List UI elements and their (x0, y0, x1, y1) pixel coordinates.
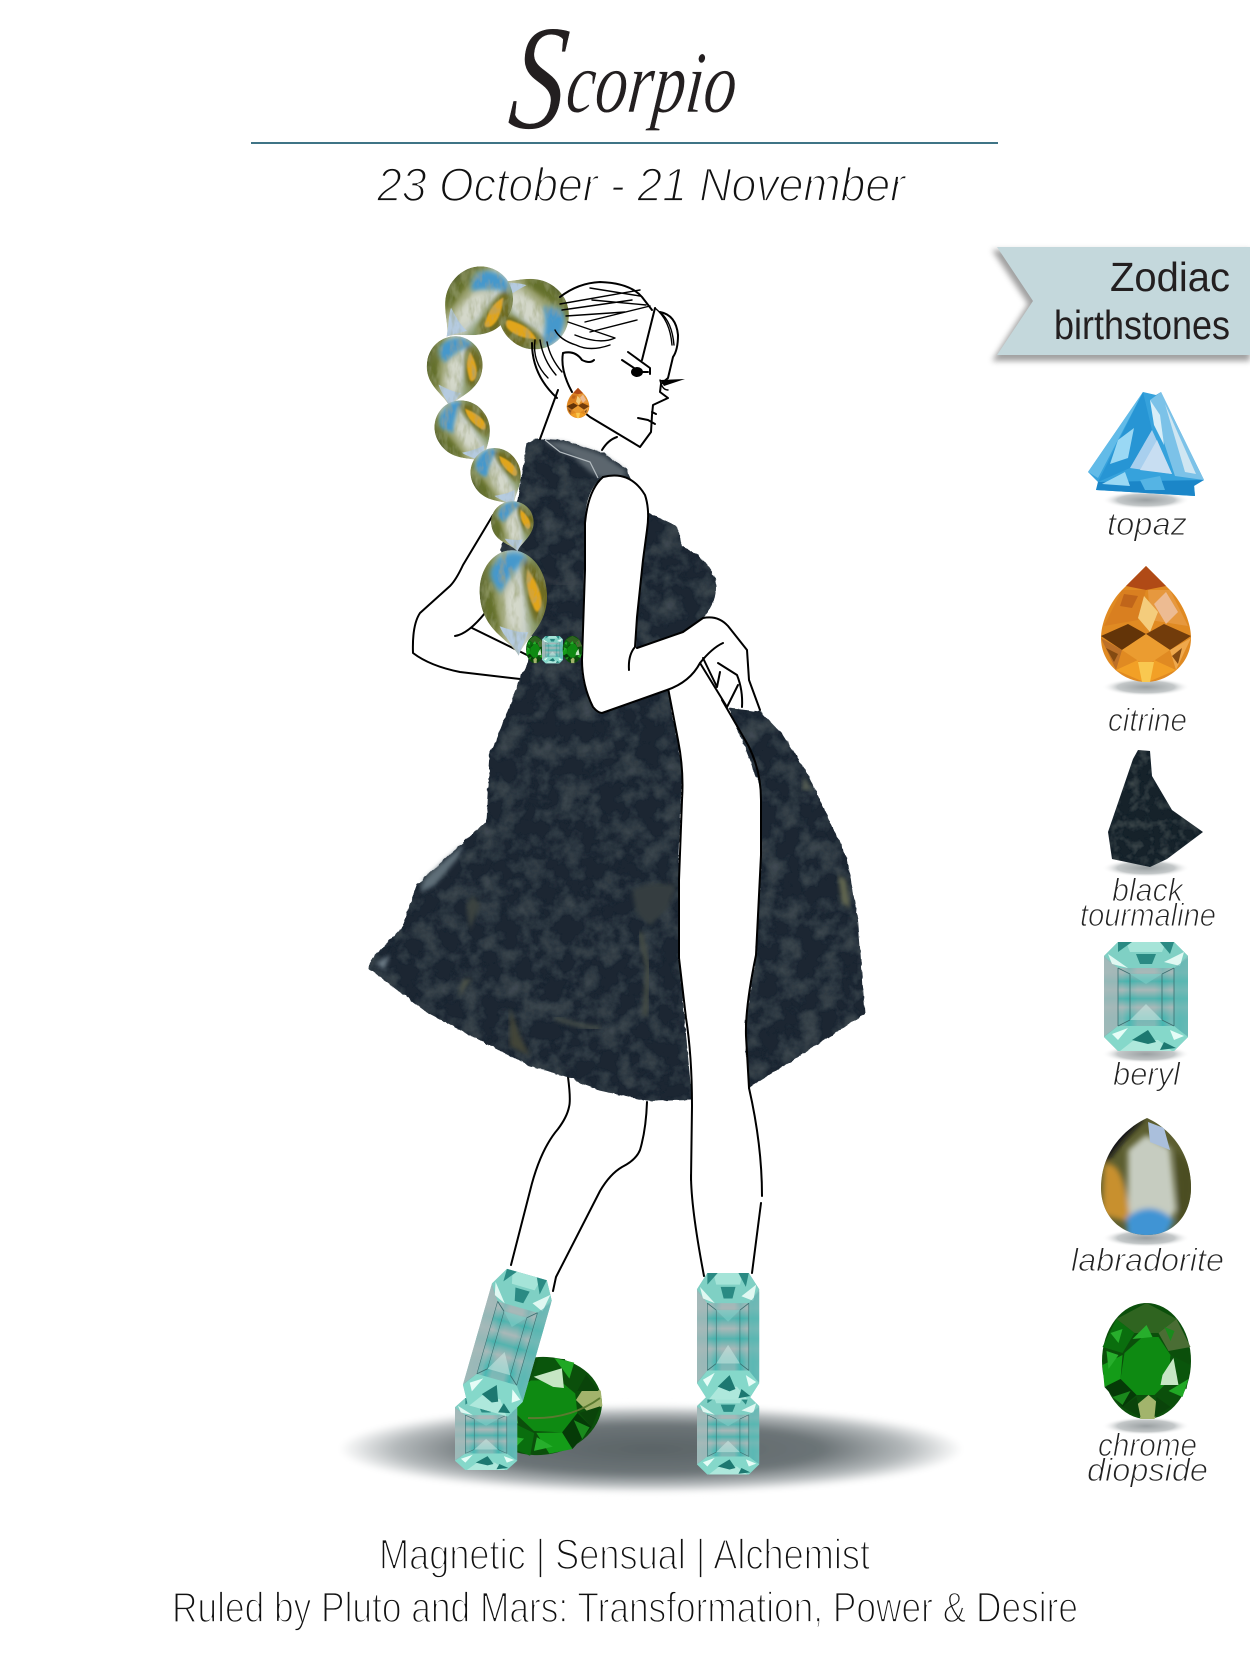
back arm (413, 515, 527, 679)
earring: citrine (567, 388, 589, 418)
front leg edge line (668, 688, 692, 1180)
label: citrine: citrine (1108, 702, 1187, 738)
label: topaz: topaz (1107, 506, 1187, 542)
front arm and hand (582, 475, 760, 713)
gem: labradorite (1101, 1118, 1191, 1246)
ponytail: labradorite beads (422, 253, 583, 659)
left boot: beryl (455, 1266, 557, 1470)
gem: chrome diopside (1102, 1303, 1191, 1435)
gem: topaz (1088, 392, 1204, 509)
head, face and hair line work (532, 282, 685, 450)
title (503, 0, 746, 161)
label: chrome diopside: diopside (1087, 1452, 1208, 1488)
legs (511, 1077, 762, 1291)
label: labradorite: labradorite (1071, 1242, 1224, 1278)
shoe heel: chrome diopside (473, 1351, 607, 1461)
gem: citrine (1101, 566, 1191, 696)
label: black tourmaline: tourmaline (1080, 897, 1216, 933)
front leg back line (722, 700, 761, 1088)
label: chrome diopside: chrome (1098, 1427, 1197, 1463)
banner: birthstones (1054, 302, 1230, 348)
banner: Zodiac (1110, 254, 1230, 300)
date range: 23 October - 21 November (376, 158, 907, 211)
dress details: collar and rock flecks (376, 440, 850, 1056)
keywords: Magnetic | Sensual | Alchemist (379, 1531, 870, 1579)
label: chrome diopside (1087, 1427, 1208, 1488)
label: black tourmaline (1080, 872, 1216, 933)
title rule (251, 142, 998, 144)
illustration: woman in gemstone dress (369, 253, 865, 1474)
gem: beryl (1102, 942, 1190, 1063)
gem: black tourmaline (1102, 750, 1203, 877)
belt: beryl and chrome diopside (526, 636, 582, 663)
ruling planets: Ruled by Pluto and Mars: Transformation, Power & Desire (172, 1584, 1078, 1632)
banner (992, 247, 1250, 361)
title: corpio (562, 34, 742, 131)
right boot: beryl (697, 1273, 759, 1474)
dress: black tourmaline (369, 439, 865, 1101)
ground shadow (339, 1405, 963, 1493)
label: beryl: beryl (1113, 1056, 1181, 1092)
label: black tourmaline: black (1112, 872, 1185, 908)
